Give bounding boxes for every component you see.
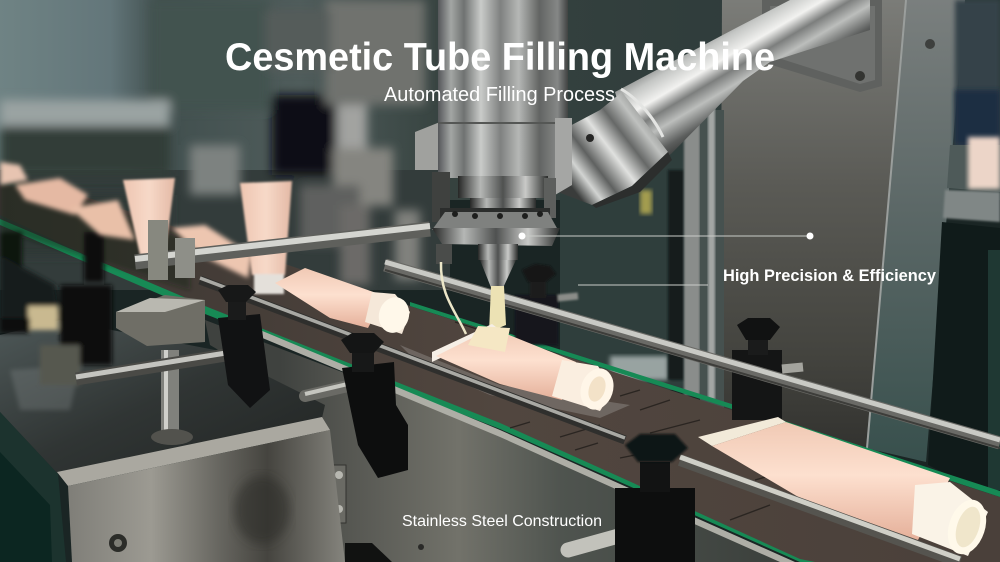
clamp knob 4 right [732,318,803,420]
clamp knob 3 foreground [568,434,695,562]
arm: stainless steel pipe [558,0,882,208]
blurred background machinery [0,0,425,285]
label: high precision: High Precision & Efficiency [723,266,937,285]
left foreground dark hardware [0,170,190,385]
foreground tube right [698,417,993,559]
right background: steel panel and column [610,0,1000,500]
clamp knob 2 with pin [305,333,408,478]
upright tube right [240,181,292,294]
blurred tubes on left of belt [0,162,252,278]
product streams [441,262,506,334]
machine base: top surface, box and dark side [0,320,345,562]
tube lying on belt behind [275,268,413,336]
clamp knob 1 [218,285,270,408]
filling head: cylinder and nozzle [415,0,572,290]
upright tube left [123,178,175,255]
label: stainless steel: Stainless Steel Construction [402,513,602,530]
callout: precision leader line [578,284,708,286]
center tube being filled [400,324,630,418]
far guide rail [385,262,1000,448]
stainless side panel under belt [205,320,795,562]
conveyor belt [0,185,1000,562]
clamp knob 5 center back [515,264,578,345]
title: Cesmetic Tube Filling Machine [225,36,775,79]
subtitle: Automated Filling Process [384,84,615,106]
callout: nozzle leader line [518,232,814,240]
front rod and bracket [76,220,430,445]
near guide rail [200,278,960,562]
